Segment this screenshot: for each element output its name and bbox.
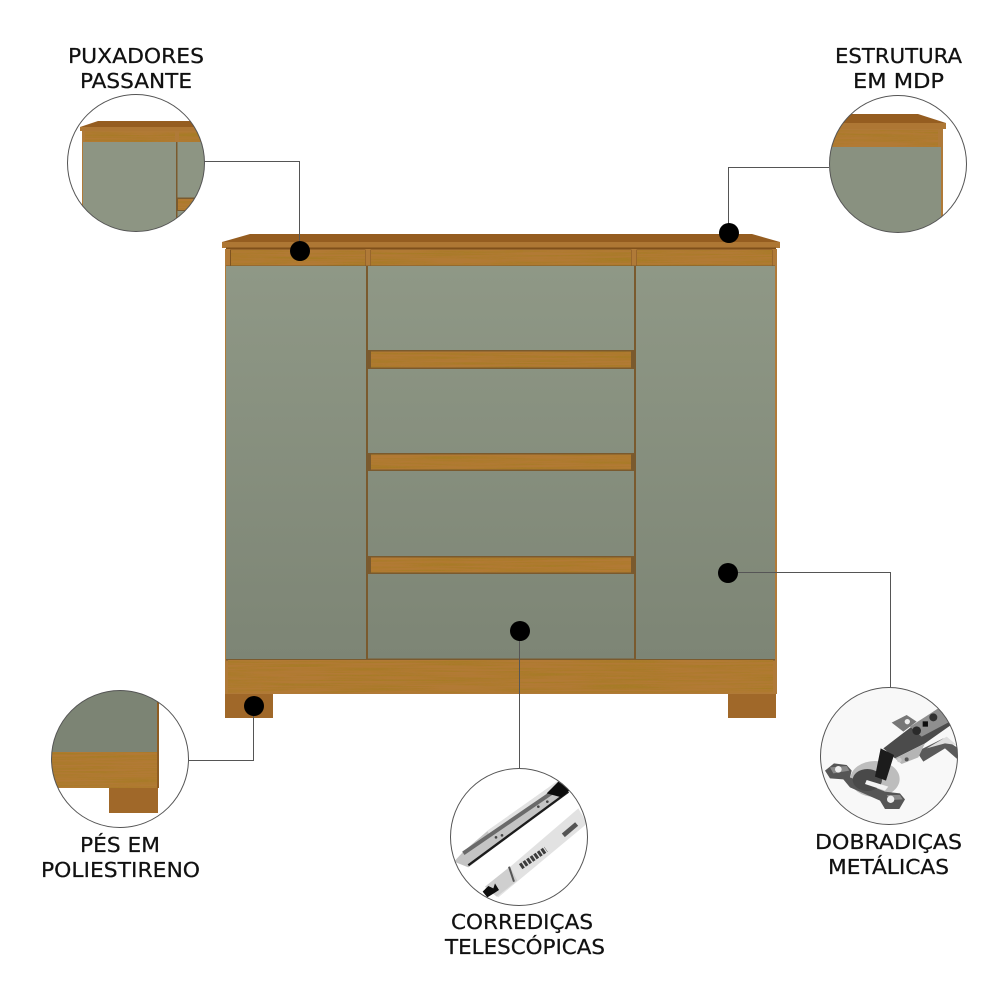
detail circle: handle [68,94,212,234]
heading: puxadores passante: PASSANTE [80,69,192,93]
drawer pull 3 [371,558,631,572]
heading: estrutura em mdp: ESTRUTURA [835,44,962,68]
callout: dobradiças metálicas [815,688,962,879]
left foot [225,694,273,718]
callout: estrutura em mdp [825,44,966,237]
heading: estrutura em mdp: EM MDP [853,69,944,93]
drawer 4 [368,574,634,658]
detail circle: telescopic slides [450,768,588,906]
connector lines [189,162,890,768]
heading: corrediças telescópicas: TELESCÓPICAS [444,934,605,959]
right foot [728,694,776,718]
right door [636,266,775,659]
heading: pés em poliestireno: PÉS EM [80,832,160,857]
heading: dobradiças metálicas: METÁLICAS [828,854,949,879]
heading: corrediças telescópicas: CORREDIÇAS [451,910,593,934]
drawer 2 [368,369,634,453]
marker dots [244,223,739,716]
drawer pull 2 [371,454,631,470]
cabinet frame [225,249,777,694]
detail circle: hinge [820,688,958,824]
heading: puxadores passante [68,44,204,93]
heading: dobradiças metálicas: DOBRADIÇAS [815,830,962,854]
heading: pés em poliestireno [41,832,200,882]
detail circle: foot [48,688,188,828]
detail circle: top structure [825,96,966,237]
cabinet top [222,234,780,249]
drawer 3 [368,471,634,556]
callout: puxadores passante [68,44,212,234]
heading: dobradiças metálicas [815,830,962,879]
callout: pés em poliestireno [41,688,200,882]
top rail wood [230,250,772,266]
heading: pés em poliestireno: POLIESTIRENO [41,858,200,882]
heading: puxadores passante: PUXADORES [68,44,204,68]
left door [226,266,366,659]
heading: estrutura em mdp [835,44,962,93]
furniture: sideboard [222,234,780,718]
heading: corrediças telescópicas [444,910,605,959]
base plinth [228,660,773,693]
panel gaps [226,266,775,660]
drawer 1 [368,266,634,350]
drawer pull 1 [371,352,631,368]
callout: corrediças telescópicas [444,768,605,959]
